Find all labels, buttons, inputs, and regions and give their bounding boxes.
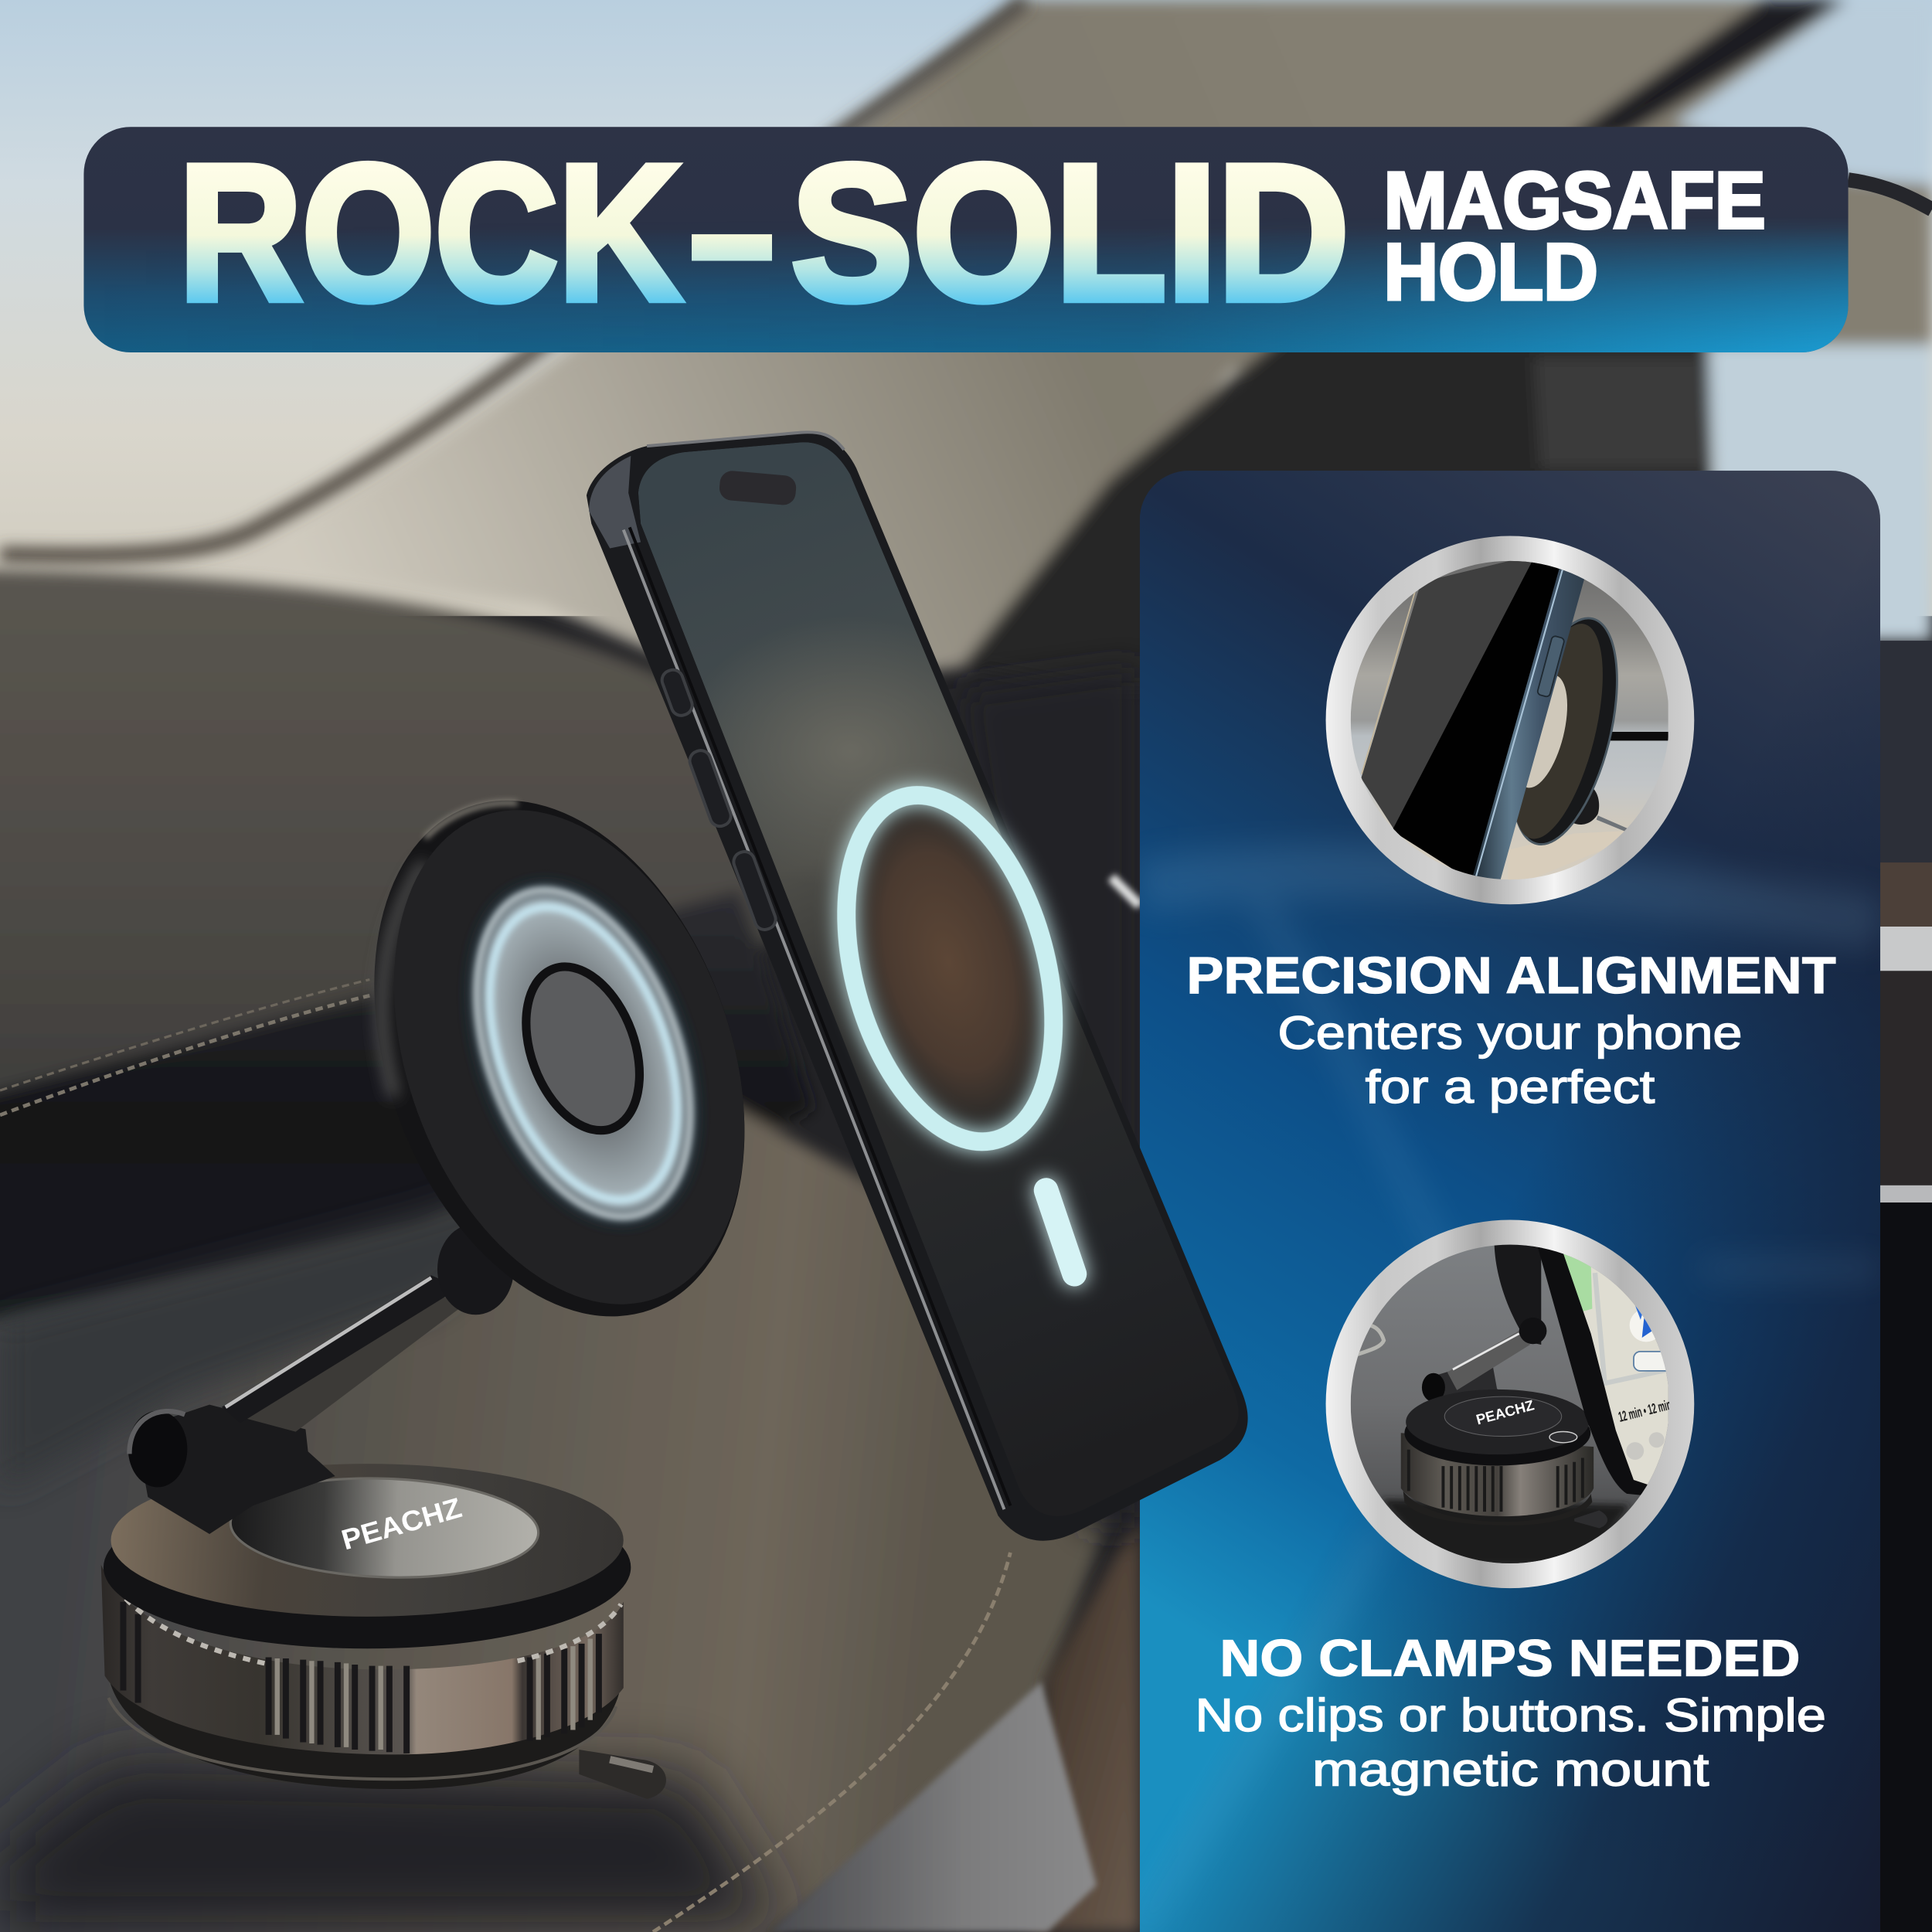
phone front glass (1361, 555, 1536, 831)
base top plate (104, 1486, 631, 1648)
bracket (1428, 1359, 1519, 1415)
mount disc side view (1516, 617, 1618, 845)
ball joint (437, 1223, 514, 1315)
subtitle: magsafe hold: HOLD (1383, 226, 1598, 316)
image circle: no clamps: 12 min • 12 min (1617, 1396, 1673, 1425)
image circle: precision alignment (1326, 536, 1694, 904)
title banner (83, 124, 1849, 352)
phone body (587, 433, 1248, 1541)
subtitle: magsafe hold (1383, 155, 1766, 316)
text: no clamps description (1196, 1689, 1826, 1795)
heading: no clamps needed: NO CLAMPS NEEDED (1219, 1629, 1800, 1687)
magsafe pill glow (1046, 1190, 1074, 1274)
text: no clamps description: magnetic mount (1312, 1743, 1709, 1795)
brand logo: PEACHZ (338, 1492, 465, 1556)
folding arm (222, 1275, 466, 1432)
text: precision description: for a perfect (1366, 1060, 1655, 1113)
arm (1447, 1331, 1530, 1390)
text: precision description: Centers your phone (1277, 1006, 1742, 1059)
image circle: no clamps (1326, 1219, 1694, 1588)
magsafe ring glow (811, 772, 1089, 1165)
base suction foot (108, 1675, 666, 1799)
text: no clamps description: No clips or buttons. Simple (1196, 1689, 1826, 1741)
title: rock-solid: ROCK (179, 124, 682, 341)
knurled ring (101, 1565, 624, 1754)
phone (587, 432, 1248, 1541)
panel: features (1140, 471, 1880, 1932)
side buttons (659, 667, 778, 933)
pivot bracket (128, 1405, 335, 1534)
phone metal edge (1471, 564, 1585, 887)
title: rock-solid: SOLID (791, 124, 1349, 341)
back glass (638, 442, 1239, 1516)
magnetic disc (307, 749, 811, 1368)
text: precision description (1277, 1006, 1742, 1113)
base top (1404, 1400, 1590, 1465)
shadow (1381, 1499, 1630, 1566)
title: rock-solid: – (690, 124, 774, 341)
camera pill (719, 470, 797, 506)
magnet ring (436, 861, 731, 1246)
heading: precision alignment: PRECISION ALIGNMENT (1186, 947, 1836, 1005)
center hub (505, 951, 661, 1146)
subtitle: magsafe hold: MAGSAFE (1383, 155, 1766, 245)
mount disc back (1495, 1240, 1541, 1345)
knurled base (1401, 1433, 1594, 1516)
phone screen (1560, 1247, 1668, 1487)
phone frame (1536, 1240, 1650, 1495)
title: rock-solid (179, 124, 1349, 341)
mount: base, arm and magnetic disc (101, 749, 811, 1799)
logo: PEACHZ (1475, 1396, 1536, 1427)
base logo cap (229, 1473, 540, 1583)
mount foot (1573, 789, 1600, 825)
